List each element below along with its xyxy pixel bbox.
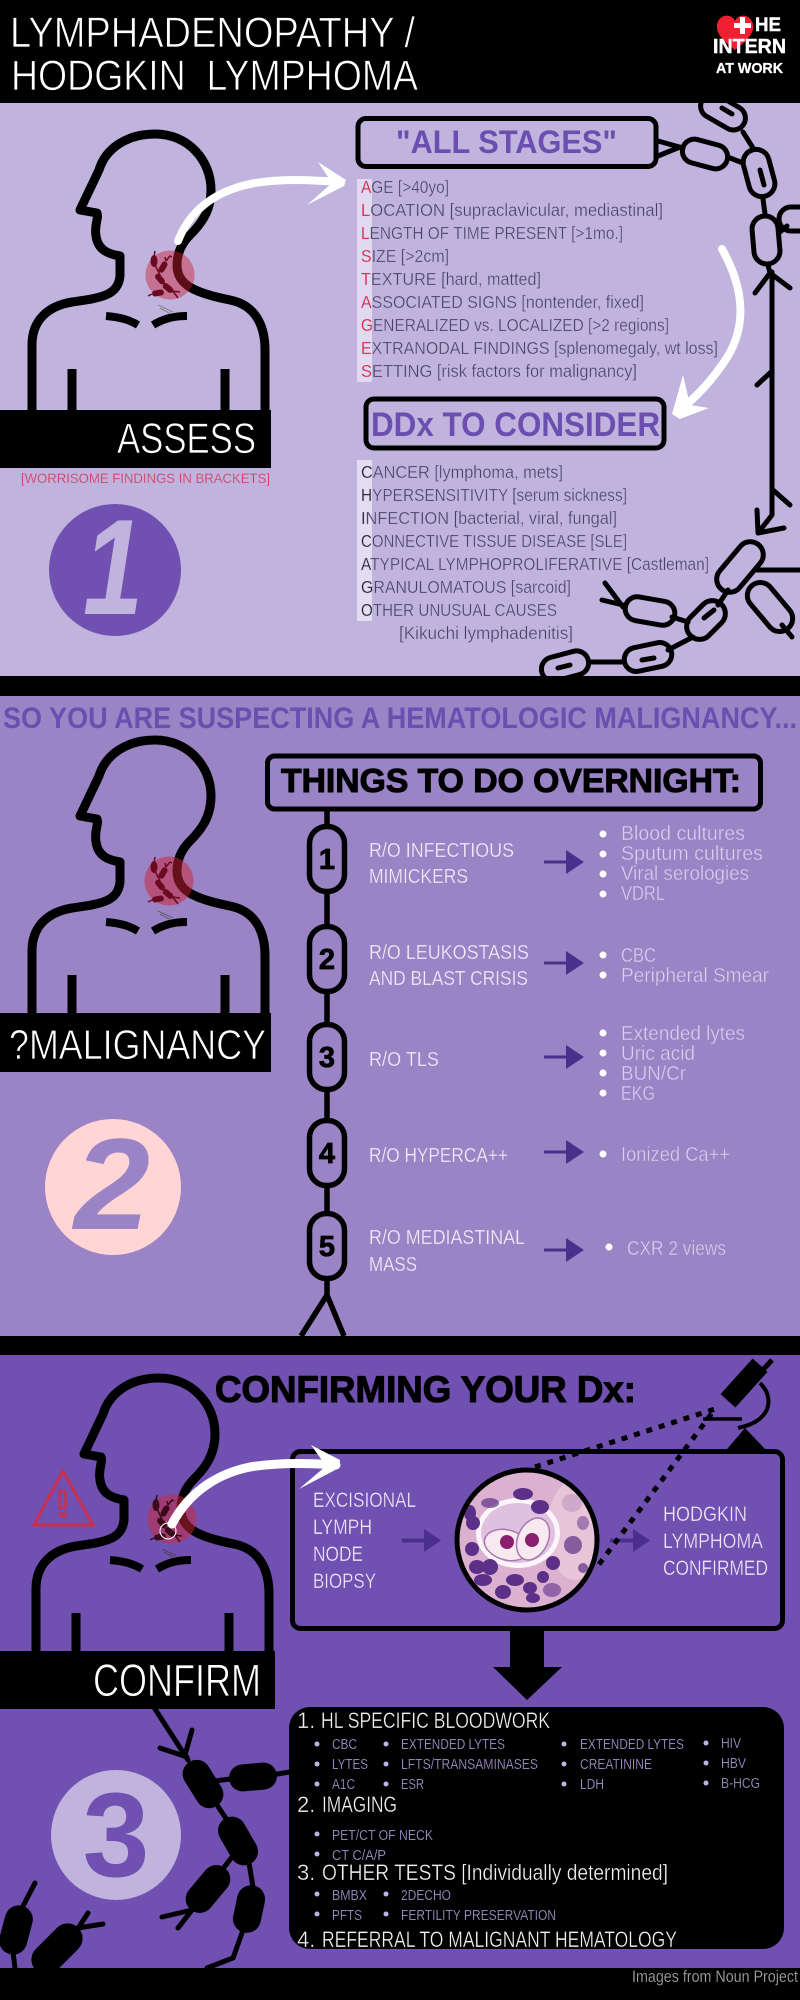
text: excisional lymph node biopsy: NODE [313,1543,363,1566]
workup 1: bloodwork heading: HL SPECIFIC BLOODWORK [321,1708,550,1733]
timeline spine with numbered pills: 1 [319,844,335,876]
list: ALL STAGES mnemonic: ASSOCIATED SIGNS [nontender, fixed] [361,292,644,312]
label: malignancy: ?MALIGNANCY [9,1021,266,1068]
histology: Reed-Sternberg cell [455,1468,603,1613]
arrow: all stages to DDx [672,249,740,419]
checklist 3: EKG [621,1083,655,1105]
bloodwork bullets: LYTES [332,1757,368,1773]
checklist 1: Blood cultures [621,823,745,845]
arrow to diagnosis [610,1529,650,1552]
step badge 3: 3 [83,1768,149,1902]
box: all stages: "ALL STAGES" [396,124,617,160]
list: CHICAGO differential: GRANULOMATOUS [sarcoid] [361,577,571,597]
dotted lines from microscope to histology [535,1409,715,1567]
box: biopsy workflow [292,1452,782,1628]
timeline spine with numbered pills: 5 [319,1231,335,1263]
bloodwork bullets: EXTENDED LYTES [580,1737,684,1753]
step 3: TLS: R/O TLS [369,1049,439,1071]
bloodwork bullets: ESR [401,1777,424,1793]
step 1: infectious mimickers: R/O INFECTIOUS [369,840,514,862]
list: ALL STAGES mnemonic: EXTRANODAL FINDINGS [splenomegaly, wt loss] [361,338,718,358]
checklist 1: Sputum cultures [621,843,763,865]
workup 2: imaging heading: IMAGING [322,1792,397,1817]
list: ALL STAGES mnemonic: TEXTURE [hard, matted] [361,269,541,289]
checklist 4: Ionized Ca++ [621,1144,730,1166]
box: things to do overnight [268,756,760,809]
arrow 5 [544,1238,584,1262]
list: ALL STAGES mnemonic: LENGTH OF TIME PRESENT [>1mo.] [361,223,623,243]
workup 4: referral: 4. [297,1927,315,1952]
timeline spine with numbered pills [301,810,344,1336]
panel: malignancy background [0,696,800,1336]
list: CHICAGO differential: [Kikuchi lymphadenitis] [399,623,573,643]
checklist 3: Extended lytes [621,1023,745,1045]
title: HODGKIN LYMPHOMA [11,52,418,100]
checklist 2: Peripheral Smear [621,965,769,987]
band between panels 2 and 3 [0,1336,800,1355]
label: malignancy [0,1013,271,1072]
workup 4: referral: REFERRAL TO MALIGNANT HEMATOLOGY [322,1927,677,1952]
lymph chain: solid nodes in confirm panel [0,1709,290,1981]
bloodwork bullets [314,1736,760,1793]
arrow to histology [402,1529,441,1552]
step 1: infectious mimickers: MIMICKERS [369,866,468,888]
list: ALL STAGES mnemonic [357,177,718,382]
checklist 3: BUN/Cr [621,1063,686,1085]
logo: The Intern at Work: AT WORK [716,60,783,77]
text: Hodgkin lymphoma confirmed: LYMPHOMA [663,1530,763,1553]
list: CHICAGO differential: HYPERSENSITIVITY [serum sickness] [361,485,627,505]
checklist 1: VDRL [621,883,665,905]
icon: warning triangle [34,1471,93,1525]
list: ALL STAGES mnemonic: GENERALIZED vs. LOCALIZED [>2 regions] [361,315,669,335]
workup 3: other tests heading: 3. [297,1860,315,1885]
other tests bullets: FERTILITY PRESERVATION [401,1908,556,1924]
header bar [0,0,800,103]
bloodwork bullets: LDH [580,1777,604,1793]
arrow: down to workup [493,1631,562,1700]
list: ALL STAGES mnemonic: LOCATION [supraclavicular, mediastinal] [361,200,663,220]
imaging bullets: PET/CT OF NECK [332,1828,433,1844]
figure: person with neck node, malignancy [32,740,265,1018]
title: LYMPHADENOPATHY / [10,9,415,57]
other tests bullets: PFTS [332,1908,362,1924]
timeline spine with numbered pills: 2 [319,944,335,976]
text: excisional lymph node biopsy: LYMPH [313,1516,372,1539]
text: Hodgkin lymphoma confirmed: CONFIRMED [663,1557,768,1580]
text: excisional lymph node biopsy: EXCISIONAL [313,1489,416,1512]
title [10,9,418,100]
other tests bullets: 2DECHO [401,1888,451,1904]
bloodwork bullets: CBC [332,1737,357,1753]
bloodwork bullets: LFTS/TRANSAMINASES [401,1757,538,1773]
logo: The Intern at Work: INTERN [713,36,786,58]
bloodwork bullets: HBV [721,1756,746,1772]
checklist 1 [600,823,763,905]
step 1: infectious mimickers [369,840,514,888]
lymph chain: outlined nodes around assess panel [539,90,800,684]
step 5: mediastinal mass: R/O MEDIASTINAL [369,1227,525,1249]
checklist 3: Uric acid [621,1043,695,1065]
box: DDx to consider: DDx TO CONSIDER [371,406,660,444]
label: confirm [0,1651,275,1709]
band between panels 1 and 2 [0,676,800,696]
icon: microscope [703,1358,772,1449]
step 2: leukostasis: AND BLAST CRISIS [369,968,528,990]
box: things to do overnight: THINGS TO DO OVERNIGHT: [281,762,741,799]
text: Hodgkin lymphoma confirmed [663,1503,768,1580]
checklist 3 [600,1023,745,1105]
other tests bullets [314,1888,556,1924]
label: assess: ASSESS [117,415,256,463]
note: worrisome findings: [WORRISOME FINDINGS IN BRACKETS] [21,470,270,486]
panel: confirm background [0,1355,800,1968]
heading: confirming your Dx: CONFIRMING YOUR Dx: [215,1369,636,1410]
arrow 1 [544,850,584,874]
text: excisional lymph node biopsy [313,1489,416,1593]
other tests bullets: BMBX [332,1888,367,1904]
footer band [0,1968,800,2000]
text: excisional lymph node biopsy: BIOPSY [313,1570,376,1593]
checklist 1: Viral serologies [621,863,749,885]
timeline spine with numbered pills: 3 [319,1042,335,1074]
bloodwork bullets: EXTENDED LYTES [401,1737,505,1753]
workup 1: bloodwork heading: 1. [297,1708,315,1733]
figure: person with neck node, assess [32,134,265,412]
step badge 1 [49,491,181,643]
label: assess [0,410,271,468]
label: confirm: CONFIRM [93,1655,261,1706]
list: ALL STAGES mnemonic: AGE [>40yo] [361,177,449,197]
list: CHICAGO differential [357,460,709,643]
list: CHICAGO differential: INFECTION [bacterial, viral, fungal] [361,508,617,528]
arrow 3 [544,1045,584,1069]
step 2: leukostasis: R/O LEUKOSTASIS [369,942,529,964]
text: Hodgkin lymphoma confirmed: HODGKIN [663,1503,747,1526]
list: CHICAGO differential: OTHER UNUSUAL CAUSES [361,600,557,620]
list: CHICAGO differential: CONNECTIVE TISSUE DISEASE [SLE] [361,531,627,551]
list: ALL STAGES mnemonic: SETTING [risk factors for malignancy] [361,361,637,381]
arrow: biopsy node to workflow box [172,1445,340,1524]
step 2: leukostasis [369,942,529,990]
list: CHICAGO differential: ATYPICAL LYMPHOPROLIFERATIVE [Castleman] [361,554,709,574]
logo: The Intern at Work [713,15,786,77]
arrow 4 [544,1140,584,1164]
list: CHICAGO differential: CANCER [lymphoma, mets] [361,462,563,482]
step badge 3 [51,1768,181,1902]
step badge 2 [45,1111,181,1257]
timeline spine with numbered pills: 4 [319,1138,335,1170]
step 5: mediastinal mass [369,1227,525,1276]
step badge 1: 1 [83,491,143,643]
panel: workup list [289,1707,784,1952]
list: ALL STAGES mnemonic: SIZE [>2cm] [361,246,449,266]
step 5: mediastinal mass: MASS [369,1254,417,1276]
figure: person with biopsy site [36,1378,269,1656]
checklist 2 [600,945,769,987]
logo: The Intern at Work: HE [755,15,781,36]
checklist 2: CBC [621,945,656,967]
panel: assess background [0,103,800,676]
workup 3: other tests heading: OTHER TESTS [Individually determined] [322,1860,668,1885]
workup 2: imaging heading: 2. [297,1792,315,1817]
bloodwork bullets: CREATININE [580,1757,652,1773]
imaging bullets: CT C/A/P [332,1848,386,1864]
box: all stages [358,118,656,166]
bloodwork bullets: HIV [721,1736,741,1752]
step badge 2: 2 [71,1111,150,1257]
checklist 5: CXR 2 views [627,1238,726,1260]
imaging bullets [314,1828,433,1864]
arrow 2 [544,951,584,975]
arrow: neck to all stages [178,162,346,241]
workup 2: imaging heading [297,1792,397,1817]
bloodwork bullets: B-HCG [721,1776,760,1792]
bloodwork bullets: A1C [332,1777,355,1793]
step 4: hypercalcemia: R/O HYPERCA++ [369,1145,508,1167]
